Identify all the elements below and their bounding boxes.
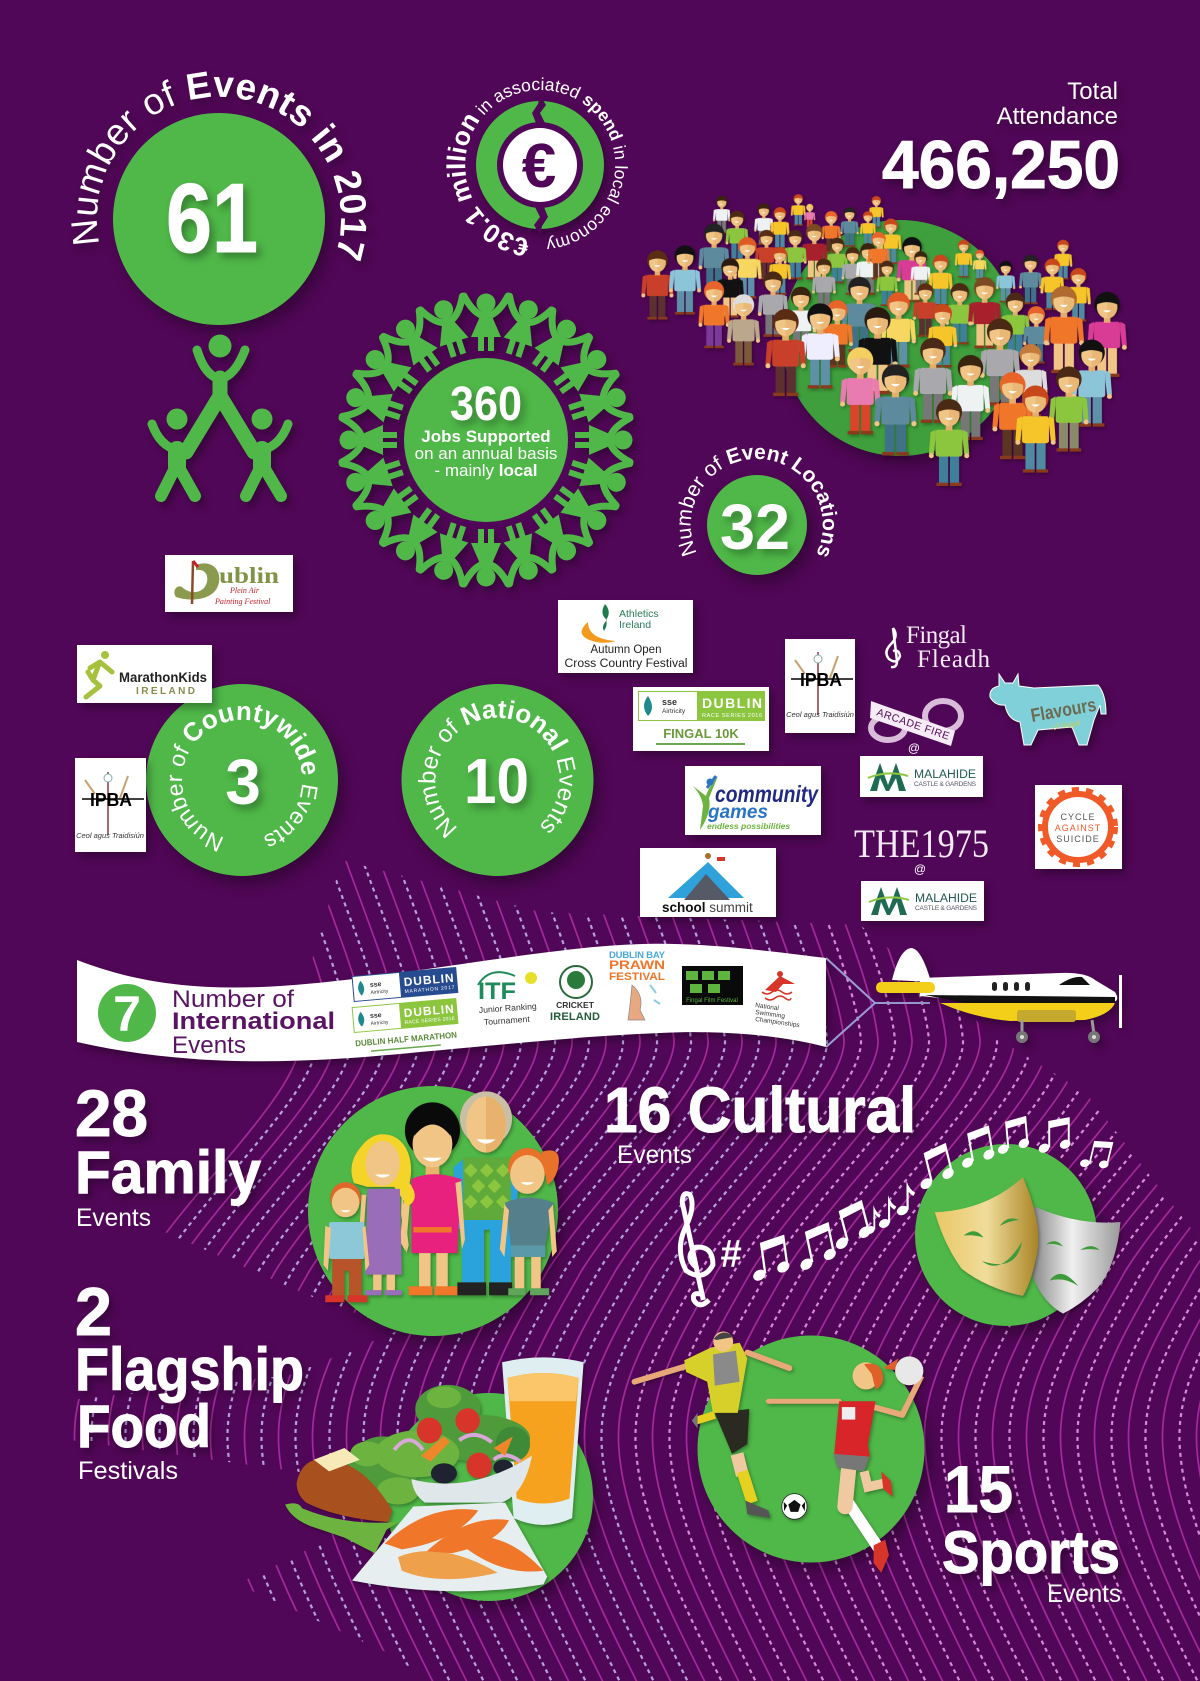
salad greens [347, 1385, 530, 1505]
logo: Athletics Ireland: Athletics [619, 608, 659, 620]
logo: ITF junior ranking tournament [478, 972, 537, 1027]
curved text: event locations: Number of Event Locations [678, 447, 838, 556]
logo: ITF junior ranking tournament: ITF [478, 978, 516, 1005]
glass of juice [502, 1357, 584, 1525]
logo: Community Games: endless possibilities [707, 821, 790, 831]
logo: Dublin Plein Air Painting Festival: Painting Festival [214, 597, 271, 606]
logo: Dublin Marathon: MARATHON 2017 [404, 985, 455, 995]
logo: Fingal Film Festival: Fingal Film Festival [686, 998, 738, 1004]
logo: IPBA left: IPBA [90, 790, 132, 810]
panel: national events [402, 684, 603, 888]
logo: The 1975: THE1975 [854, 821, 989, 866]
number: 360: 360 [450, 378, 522, 431]
football [782, 1494, 807, 1519]
logo: SSE Fingal 10K: Airtricity [662, 708, 686, 715]
logo: Athletics Ireland: Ireland [619, 619, 651, 631]
text: 2 flagship food festivals: Flagship [75, 1336, 304, 1403]
text: 28 family events: Events [76, 1204, 151, 1232]
logo: ITF junior ranking tournament: Junior Ranking [478, 1001, 537, 1015]
logo: Malahide Castle bottom [861, 881, 984, 921]
roast chicken [297, 1448, 392, 1522]
logo: Dublin Half Marathon: RACE SERIES 2016 [404, 1016, 455, 1026]
logo: Fingal Fleadh [886, 622, 990, 673]
circle: 7 [98, 984, 156, 1042]
netball [895, 1356, 923, 1385]
salad toppings [394, 1408, 520, 1483]
logo: Dublin Marathon: Airtricity [370, 988, 389, 996]
text: 15 sports events: Sports [942, 1519, 1120, 1586]
logo: SSE Fingal 10K: sse [662, 697, 677, 707]
lettuce [285, 1503, 398, 1553]
curved heading: number of events in 2017: Number of Events in 2017 [71, 72, 370, 266]
salad bowl [411, 1456, 532, 1503]
family illustration [323, 1091, 559, 1302]
panel: number of event locations [678, 447, 838, 586]
label: total attendance: Attendance [997, 103, 1118, 130]
icon: gold comedy mask [935, 1177, 1038, 1296]
logo: MarathonKids Ireland: IRELAND [136, 686, 195, 697]
logo: Dublin Marathon: DUBLIN [403, 971, 454, 989]
number: 3: 3 [225, 746, 261, 818]
text: jobs supported: Jobs Supported [421, 427, 551, 446]
logo: SSE Fingal 10K [633, 687, 769, 751]
logo: National Swimming Championships [755, 971, 801, 1029]
text: 16 cultural events: Events [617, 1141, 692, 1169]
logo: Dublin Plein Air Painting Festival [165, 555, 293, 612]
logo: SSE Fingal 10K: DUBLIN [702, 695, 762, 711]
label: total attendance: Total [1067, 78, 1118, 105]
text: jobs supported: - mainly local [435, 461, 537, 480]
logo: Athletics Ireland [558, 600, 693, 673]
text: jobs supported: on an annual basis [415, 444, 557, 463]
panel: flagship food festivals [75, 1274, 593, 1601]
food illustration [285, 1357, 584, 1591]
logo: Dublin Half Marathon: Airtricity [370, 1019, 389, 1027]
logo: Cricket Ireland [550, 966, 600, 1023]
text: 28 family events [75, 1076, 262, 1232]
panel: family events [75, 1076, 559, 1336]
logo: school summit: school summit [662, 900, 753, 915]
logo: Dublin Half Marathon: sse [370, 1012, 382, 1020]
text: 2 flagship food festivals: Food [77, 1393, 211, 1460]
logo: Malahide Castle top [860, 756, 983, 797]
text: 2 flagship food festivals: 2 [75, 1274, 112, 1350]
icon: acrobats [152, 334, 288, 496]
logo: National Swimming Championships: Championships [755, 1016, 801, 1029]
number: 32: 32 [720, 491, 790, 563]
text: 15 sports events: 15 [944, 1452, 1013, 1526]
logo: Dublin Plein Air Painting Festival: ublin [219, 563, 279, 588]
logo: Dublin Half Marathon: DUBLIN HALF MARATHON [355, 1030, 457, 1048]
panel: cultural events [604, 1074, 1120, 1326]
plate [352, 1503, 547, 1591]
panel: 30.1 million spend [446, 77, 628, 256]
logo: Cricket Ireland: CRICKET [556, 1000, 595, 1010]
logo: Dublin Bay Prawn Festival [609, 950, 666, 1020]
curved text: countywide events: Number of Countywide Events [170, 704, 318, 852]
icon: euro coin with arrows [488, 95, 592, 235]
woman in pink [400, 1102, 465, 1295]
text: 15 sports events [942, 1452, 1121, 1608]
logo: school summit [640, 848, 776, 917]
logo: Malahide Castle top: CASTLE & GARDENS [914, 781, 977, 788]
panel: number of events in 2017 [71, 72, 370, 336]
grandfather [453, 1091, 519, 1295]
logo: Cricket Ireland: IRELAND [550, 1011, 600, 1023]
music notes [721, 1116, 1115, 1284]
logo: IPBA left: Ceol agus Traidisiún [76, 831, 144, 840]
logo: Dublin Marathon: sse [370, 981, 382, 989]
logo: Cycle Against Suicide: SUICIDE [1056, 834, 1100, 844]
logo: The 1975: @ [914, 862, 926, 876]
number: 61: 61 [166, 163, 258, 273]
logo: National Swimming Championships: Swimming [755, 1009, 786, 1020]
logo: Fingal Fleadh: Fleadh [917, 646, 990, 673]
text: number of international events: Events [172, 1032, 246, 1059]
text: 15 sports events: Events [1047, 1580, 1121, 1608]
icon: silver tragedy mask [1032, 1206, 1120, 1314]
circle: 7: 7 [113, 986, 141, 1042]
logo: Flavours of Fingal cow: Flavours [1029, 695, 1098, 727]
logo: Fingal Fleadh: Fingal [906, 622, 967, 649]
text: number of international events: Number of [172, 986, 294, 1013]
logo: Dublin Half Marathon: DUBLIN [403, 1002, 454, 1020]
logo: MarathonKids Ireland: MarathonKids [119, 670, 207, 685]
logo: SSE Fingal 10K: RACE SERIES 2016 [702, 713, 762, 719]
crowd of people [641, 194, 1127, 486]
icon: treble clef [680, 1194, 713, 1305]
logo: Malahide Castle bottom: MALAHIDE [915, 893, 977, 905]
panel: 360 jobs supported [340, 294, 632, 586]
netball player [768, 1358, 921, 1573]
music notes: # [721, 1232, 742, 1276]
logo: IPBA right [785, 639, 855, 733]
logo: Malahide Castle bottom: CASTLE & GARDENS [915, 905, 978, 912]
text: 28 family events: 28 [75, 1076, 148, 1150]
people ring [340, 294, 632, 586]
logo: National Swimming Championships: National [755, 1002, 780, 1012]
text: number of international events: International [172, 1008, 335, 1035]
number: 10: 10 [464, 745, 529, 817]
text: 28 family events: Family [75, 1139, 262, 1206]
logo: Athletics Ireland: Cross Country Festival [564, 658, 688, 670]
logo: Community Games: games [707, 802, 768, 823]
logo: Arcade Fire: @ [908, 741, 920, 755]
icon: plane [876, 948, 1122, 1043]
panel: countywide events [146, 684, 348, 888]
text: 2 flagship food festivals [75, 1274, 304, 1485]
number: 466,250: 466,250 [882, 127, 1120, 203]
logo: Dublin Bay Prawn Festival: PRAWN [609, 958, 665, 972]
logo: Cycle Against Suicide: AGAINST [1055, 823, 1101, 833]
logo: Dublin Bay Prawn Festival: DUBLIN BAY [609, 950, 666, 961]
logo: Fingal Film Festival [682, 966, 743, 1005]
banner: international events [77, 944, 826, 1061]
logo: Flavours of Fingal cow [990, 674, 1106, 745]
logo: Dublin Marathon [352, 968, 458, 1001]
curved text: spend in local economy: €30.1 million in associated spend in local economy [446, 77, 628, 256]
panel: sports events [634, 1331, 1121, 1608]
logo: Dublin Half Marathon [352, 999, 460, 1052]
tow lines [826, 958, 930, 1047]
logo: SSE Fingal 10K: FINGAL 10K [663, 726, 739, 741]
logo: Athletics Ireland: Autumn Open [591, 644, 661, 656]
football player [634, 1331, 789, 1518]
blonde girl [351, 1134, 415, 1295]
boy [323, 1182, 369, 1302]
logo: Dublin Bay Prawn Festival: FESTIVAL [609, 971, 665, 983]
text: 2 flagship food festivals: Festivals [78, 1457, 178, 1485]
logo: IPBA right: IPBA [800, 670, 842, 690]
panel: total attendance [882, 78, 1120, 203]
logo: Arcade Fire: ARCADE FIRE [875, 706, 951, 743]
logo: Community Games: community [715, 781, 819, 807]
salmon pieces [385, 1509, 543, 1579]
logo: Dublin Plein Air Painting Festival: Plein Air [229, 586, 260, 595]
icon: euro coin with arrows: € [522, 132, 556, 201]
girl with ponytail [500, 1148, 559, 1295]
logo: Malahide Castle top: MALAHIDE [914, 769, 976, 781]
logo: IPBA right: Ceol agus Traidisiún [786, 710, 854, 719]
logo: Cycle Against Suicide [1035, 785, 1122, 869]
curved text: national events: Number of National Events [418, 700, 576, 838]
logo: MarathonKids Ireland [77, 645, 212, 703]
logo: Community Games [685, 766, 821, 835]
circle: 61 [113, 113, 325, 325]
logo: Arcade Fire [870, 701, 961, 755]
text: 16 cultural events: 16 Cultural [604, 1074, 916, 1146]
logo: ITF junior ranking tournament: Tournament [483, 1014, 531, 1027]
logo: IPBA left [75, 758, 146, 852]
logo: Cycle Against Suicide: CYCLE [1060, 812, 1096, 822]
logo: Flavours of Fingal cow: of fingal [1052, 718, 1081, 732]
